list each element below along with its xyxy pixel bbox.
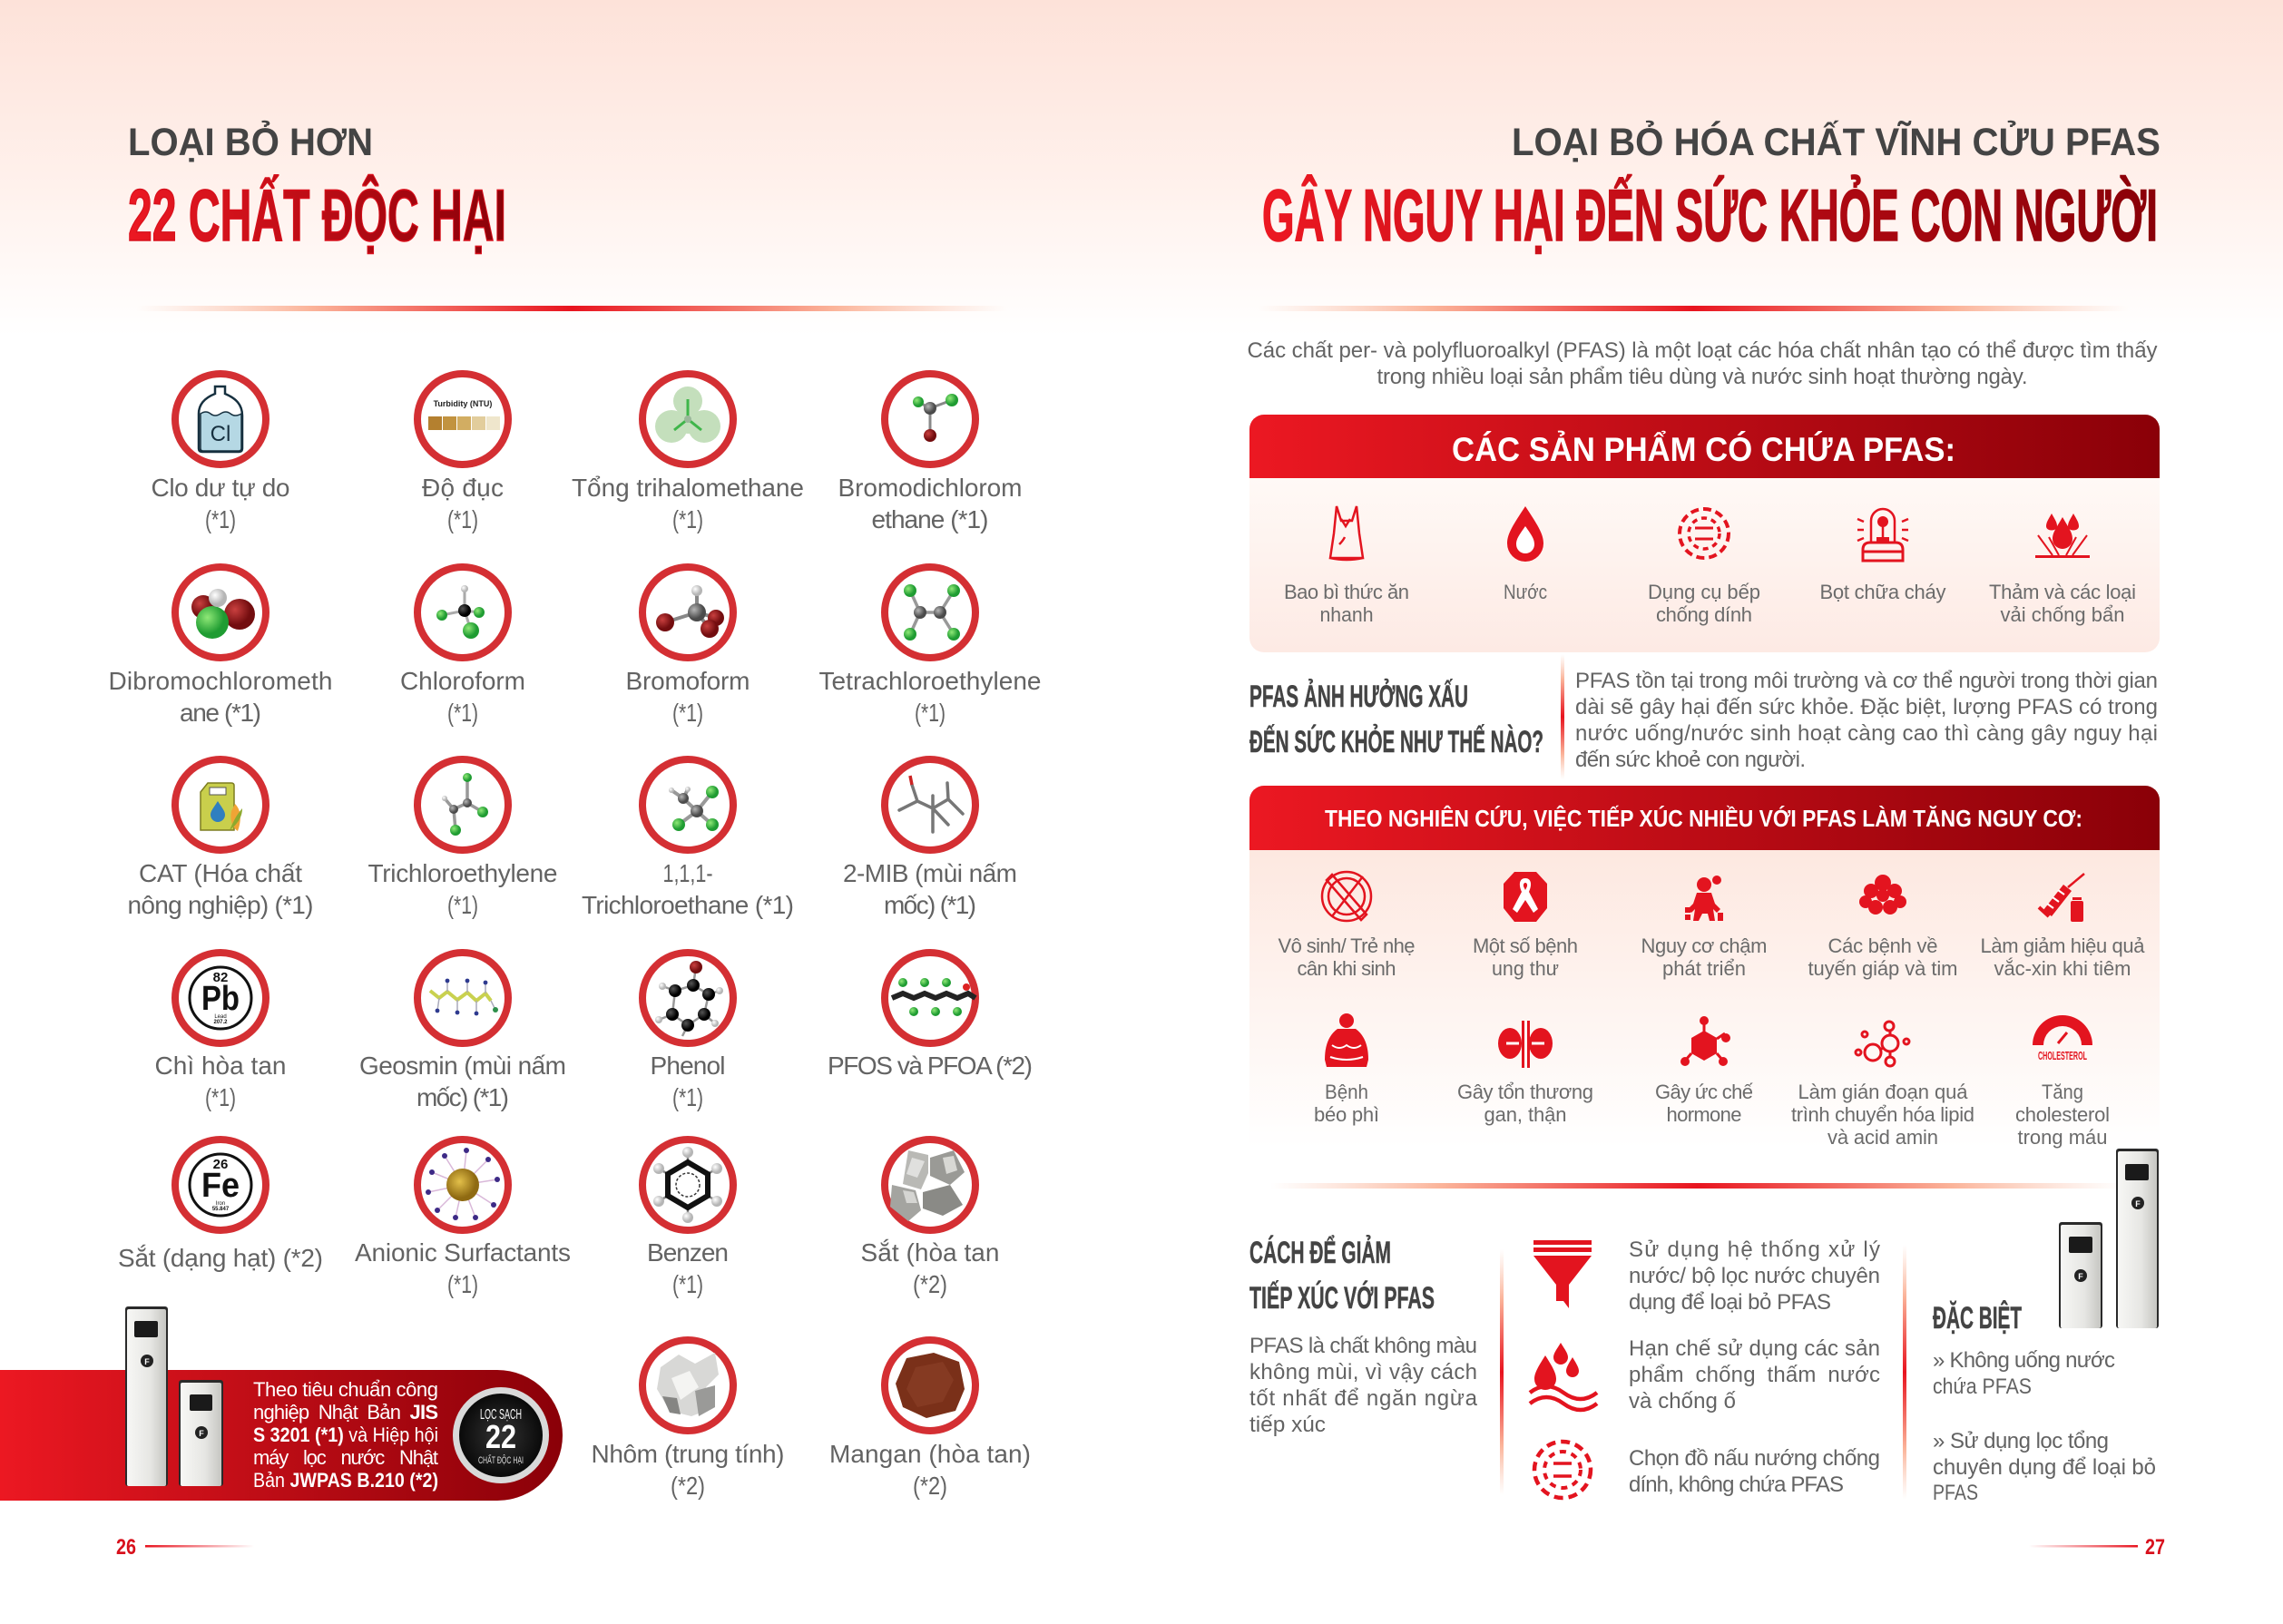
heading bar: THEO NGHIÊN CỨU, VIỆC TIẾP XÚC NHIỀU VỚI PFAS LÀM TĂNG NGUY CƠ: xyxy=(1325,805,2082,832)
left page heading xyxy=(128,120,506,257)
risk: cancer: Một số bệnh xyxy=(1473,934,1578,957)
item: Sat dang hat: 55.847 xyxy=(212,1207,230,1212)
block: how to reduce exposure: PFAS là chất không màu xyxy=(1249,1334,1477,1358)
block: special notes: PFAS xyxy=(1933,1481,1978,1505)
tip: non-stick cookware xyxy=(1629,1446,1880,1497)
risk: cancer: ung thư xyxy=(1492,957,1559,980)
risk: developmental delay xyxy=(1641,876,1768,980)
banner text: S 3201 (*1) và Hiệp hội xyxy=(253,1423,438,1446)
item: Benzen: Benzen xyxy=(647,1238,729,1267)
block: how to reduce exposure: CÁCH ĐỂ GIẢM xyxy=(1249,1236,1391,1270)
label: carpet xyxy=(1989,581,2136,626)
item: Bromodichloromethane: ethane (*1) xyxy=(871,505,989,533)
badge: 22: LỌC SẠCH xyxy=(480,1407,522,1423)
item: Tetrachloroethylene: (*1) xyxy=(915,699,946,727)
item: Mangan xyxy=(829,1340,1031,1500)
item: Do duc xyxy=(417,374,508,533)
item: 2-MIB: 2-MIB (mùi nấm xyxy=(843,859,1017,887)
risk: cholesterol: trong máu xyxy=(2018,1126,2107,1149)
item: Sat hoa tan: (*2) xyxy=(913,1270,947,1298)
tip: filter: dụng để loại bỏ PFAS xyxy=(1629,1290,1831,1315)
panel: products containing PFAS xyxy=(1249,415,2160,652)
icon: carpet fabric xyxy=(2035,514,2090,558)
item: Bromoform: (*1) xyxy=(672,699,703,727)
risk: liver kidney xyxy=(1457,1021,1593,1126)
header background xyxy=(0,0,2283,336)
risk: liver kidney: Gây tổn thương xyxy=(1457,1081,1593,1103)
item: Do duc: (*1) xyxy=(447,505,478,533)
product: tall filter xyxy=(125,1306,168,1486)
banner text: nghiệp Nhật Bản JIS xyxy=(253,1401,438,1423)
product: small filter right: F xyxy=(2078,1272,2083,1281)
label: foam: Bọt chữa cháy xyxy=(1820,581,1945,603)
block: how to reduce exposure: tốt nhất để ngăn ngừa xyxy=(1249,1386,1478,1411)
block: PFAS health paragraph: PFAS tồn tại trong môi trường và cơ thể người trong thời gian xyxy=(1575,669,2158,693)
item: 2-MIB: mốc) (*1) xyxy=(884,891,976,919)
item: Clo du tu do: Cl xyxy=(211,422,230,446)
product: small filter right xyxy=(2059,1222,2102,1328)
risk: liver kidney: gan, thận xyxy=(1484,1103,1566,1126)
risk: hormone: hormone xyxy=(1666,1103,1742,1126)
item: Anionic Surfactants xyxy=(355,1140,571,1298)
banner text: Theo tiêu chuẩn công xyxy=(253,1378,438,1401)
product: small filter: F xyxy=(199,1429,204,1438)
item: Tong trihalomethane: Tổng trihalomethane xyxy=(572,474,804,502)
label: water: Nước xyxy=(1504,581,1547,603)
panel: health risks xyxy=(1249,786,2160,1149)
block: special notes: ĐẶC BIỆT xyxy=(1933,1301,2022,1335)
left page heading: LOẠI BỎ HƠN xyxy=(128,120,373,164)
tip: limit water-proof products xyxy=(1629,1336,1880,1414)
item: Geosmin: mốc) (*1) xyxy=(416,1083,509,1111)
heading bar xyxy=(1249,415,2160,478)
item: Geosmin: Geosmin (mùi nấm xyxy=(359,1052,566,1080)
block: how to reduce exposure: không mùi, vì vậy cách xyxy=(1249,1360,1477,1384)
risk: hormone: Gây ức chế xyxy=(1655,1081,1753,1103)
risk: cholesterol: cholesterol xyxy=(2015,1103,2110,1126)
item: PFOS PFOA: PFOS và PFOA (*2) xyxy=(828,1052,1033,1080)
left page heading: 22 CHẤT ĐỘC HẠI xyxy=(128,174,506,257)
label: bag xyxy=(1284,581,1409,626)
risk: thyroid and heart xyxy=(1808,875,1958,980)
icon: fire foam alarm xyxy=(1857,509,1908,561)
badge: 22 xyxy=(453,1387,549,1483)
item: Clo du tu do: (*1) xyxy=(205,505,236,533)
product: small filter xyxy=(179,1380,223,1486)
item: Dibromochloromethane xyxy=(109,567,332,727)
item: Dibromochloromethane: ane (*1) xyxy=(180,699,261,727)
item: Sat dang hat: 26 xyxy=(213,1157,228,1172)
risk: hormone xyxy=(1655,1016,1753,1126)
block: PFAS health question: PFAS ẢNH HƯỞNG XẤU xyxy=(1249,680,1468,714)
item: Chi hoa tan: Lead xyxy=(214,1014,227,1020)
item: Chi hoa tan: 207.2 xyxy=(213,1020,228,1025)
item: Chi hoa tan xyxy=(154,953,287,1111)
label: cookware: Dụng cụ bếp xyxy=(1648,581,1760,603)
block: special notes: chuyên dụng để loại bỏ xyxy=(1933,1455,2156,1480)
item: Bromodichloromethane: Bromodichlorom xyxy=(838,474,1022,502)
item: Mangan: Mangan (hòa tan) xyxy=(829,1440,1031,1468)
item: Chloroform: (*1) xyxy=(447,699,478,727)
icon: cookware xyxy=(1680,509,1729,558)
item: Trichloroethylene: Trichloroethylene xyxy=(368,859,557,887)
item: Nhom: Nhôm (trung tính) xyxy=(592,1440,784,1468)
block: special notes: chứa PFAS xyxy=(1933,1375,2032,1399)
item: Bromodichloromethane xyxy=(838,374,1022,533)
risk: lipid and amino acid: trình chuyển hóa lipid xyxy=(1791,1103,1974,1126)
risk: thyroid and heart: Các bệnh về xyxy=(1827,934,1938,957)
tip: non-stick cookware: Chọn đồ nấu nướng chống xyxy=(1629,1446,1880,1471)
item: PFOS PFOA xyxy=(828,953,1033,1080)
intro text xyxy=(1247,338,2158,389)
intro text: trong nhiều loại sản phẩm tiêu dùng và nước sinh hoạt thường ngày. xyxy=(1377,365,2027,389)
icon: water drops xyxy=(1530,1343,1597,1410)
icon: bag xyxy=(1330,506,1363,560)
product: tall filter right: F xyxy=(2135,1199,2141,1208)
item: Chi hoa tan: (*1) xyxy=(205,1083,236,1111)
risk: vaccine: Làm giảm hiệu quả xyxy=(1980,934,2145,957)
item: Benzen: (*1) xyxy=(672,1270,703,1298)
item: Anionic Surfactants: Anionic Surfactants xyxy=(355,1238,571,1267)
badge: 22: CHẤT ĐỘC HẠI xyxy=(478,1454,524,1466)
item: Sat hoa tan: Sắt (hòa tan xyxy=(860,1238,1000,1267)
item: Mangan: (*2) xyxy=(913,1472,947,1500)
risk: lipid and amino acid: và acid amin xyxy=(1827,1126,1938,1149)
block: PFAS health paragraph: dài sẽ gây hại đến sức khỏe. Đặc biệt, lượng PFAS có trong xyxy=(1575,695,2158,719)
page number 26: 26 xyxy=(116,1535,136,1560)
risk: infertility: Vô sinh/ Trẻ nhẹ xyxy=(1278,934,1416,957)
risk: obesity: Bệnh xyxy=(1325,1081,1368,1103)
right page heading xyxy=(1262,120,2161,257)
heading bar xyxy=(1249,786,2160,850)
risk: developmental delay: phát triển xyxy=(1662,957,1746,980)
risk: vaccine xyxy=(1980,874,2145,980)
item: Tong trihalomethane: (*1) xyxy=(672,505,703,533)
item: Clo du tu do xyxy=(151,374,290,533)
heading bar: CÁC SẢN PHẨM CÓ CHỨA PFAS: xyxy=(1452,430,1955,468)
item: Sat dang hat xyxy=(118,1140,323,1272)
risk: vaccine: vắc-xin khi tiêm xyxy=(1994,957,2131,980)
item: Dibromochloromethane: Dibromochlorometh xyxy=(109,667,332,695)
item: Sat hoa tan xyxy=(860,1140,1000,1298)
block: PFAS health question: ĐẾN SỨC KHỎE NHƯ THẾ NÀO? xyxy=(1249,725,1543,759)
item: Phenol xyxy=(642,953,733,1111)
item: Sat dang hat: Iron xyxy=(216,1201,225,1207)
icon: funnel xyxy=(1533,1240,1592,1308)
tip: limit water-proof products: phẩm chống thấm nước xyxy=(1629,1363,1880,1387)
tip: non-stick cookware: dính, không chứa PFAS xyxy=(1629,1472,1844,1497)
block: how to reduce exposure xyxy=(1249,1236,1478,1437)
item: Bromoform: Bromoform xyxy=(626,667,750,695)
label: bag: nhanh xyxy=(1319,603,1374,626)
block: PFAS health paragraph: đến sức khoẻ con người. xyxy=(1575,748,1806,772)
banner text xyxy=(253,1378,438,1492)
item: Clo du tu do: Clo dư tự do xyxy=(151,474,290,502)
item: Bromoform xyxy=(626,567,750,727)
item: Nhom: (*2) xyxy=(671,1472,705,1500)
item: Anionic Surfactants: (*1) xyxy=(447,1270,478,1298)
risk: cholesterol: Tăng xyxy=(2042,1081,2083,1103)
item: Chi hoa tan: 82 xyxy=(213,970,228,985)
block: how to reduce exposure: tiếp xúc xyxy=(1249,1413,1326,1437)
list: reduction tips xyxy=(1530,1238,1880,1498)
item: Trichloroethylene: (*1) xyxy=(447,891,478,919)
banner text: máy lọc nước Nhật xyxy=(253,1446,438,1469)
page number 27: 27 xyxy=(2145,1535,2165,1560)
right page heading: LOẠI BỎ HÓA CHẤT VĨNH CỬU PFAS xyxy=(1512,120,2161,164)
callout: standards banner xyxy=(0,1306,563,1501)
risk: lipid and amino acid xyxy=(1791,1022,1974,1149)
item: Geosmin xyxy=(359,953,566,1111)
item: 1,1,1-Trichloroethane xyxy=(582,759,794,919)
tip: limit water-proof products: và chống ố xyxy=(1629,1389,1736,1414)
item: Chi hoa tan: Pb xyxy=(201,980,240,1018)
block: special notes: » Không uống nước xyxy=(1933,1348,2115,1373)
product: tall filter right xyxy=(2116,1149,2159,1328)
badge: 22: 22 xyxy=(485,1418,516,1455)
panel: chemicals grid xyxy=(109,374,1042,1500)
block: PFAS health question xyxy=(1249,680,1543,759)
risk: obesity xyxy=(1314,1013,1379,1126)
risk: infertility: cân khi sinh xyxy=(1298,957,1396,980)
item: Phenol: (*1) xyxy=(672,1083,703,1111)
item: CAT: nông nghiệp) (*1) xyxy=(127,891,314,919)
item: Sat dang hat: Sắt (dạng hạt) (*2) xyxy=(118,1244,323,1272)
risk: obesity: béo phì xyxy=(1314,1103,1379,1126)
item: Chi hoa tan: Chì hòa tan xyxy=(154,1052,287,1080)
item: Chloroform: Chloroform xyxy=(400,667,525,695)
risk: infertility xyxy=(1278,872,1416,980)
block: how to reduce exposure: TIẾP XÚC VỚI PFAS xyxy=(1249,1281,1435,1316)
item: Do duc: Độ đục xyxy=(422,474,504,502)
item: 2-MIB xyxy=(843,759,1017,919)
risk: cholesterol xyxy=(2015,1015,2110,1149)
item: 1,1,1-Trichloroethane: 1,1,1- xyxy=(662,859,713,887)
tip: filter: nước/ bộ lọc nước chuyên xyxy=(1629,1264,1880,1288)
block: special notes: » Sử dụng lọc tổng xyxy=(1933,1429,2109,1453)
item: Tetrachloroethylene xyxy=(818,567,1042,727)
risk: lipid and amino acid: Làm gián đoạn quá xyxy=(1798,1081,1968,1103)
tip: filter: Sử dụng hệ thống xử lý xyxy=(1629,1238,1880,1262)
intro text: Các chất per- và polyfluoroalkyl (PFAS) là một loạt các hóa chất nhân tạo có thể được tìm thấy xyxy=(1247,338,2158,363)
banner text: Bản JWPAS B.210 (*2) xyxy=(253,1469,438,1492)
block: PFAS health paragraph xyxy=(1575,669,2158,772)
label: cookware: chống dính xyxy=(1656,603,1752,626)
item: CAT: CAT (Hóa chất xyxy=(139,859,302,887)
icon: cookware xyxy=(1534,1442,1591,1498)
item: Do duc: Turbidity (NTU) xyxy=(434,399,492,408)
item: Nhom xyxy=(592,1340,784,1500)
item: 1,1,1-Trichloroethane: Trichloroethane (*1) xyxy=(582,891,794,919)
item: Sat dang hat: Fe xyxy=(201,1167,240,1205)
icon: drop xyxy=(1507,506,1543,562)
risk: cholesterol: CHOLESTEROL xyxy=(2038,1049,2087,1062)
item: Tetrachloroethylene: Tetrachloroethylene xyxy=(818,667,1042,695)
tip: filter xyxy=(1629,1238,1880,1315)
item: Trichloroethylene xyxy=(368,759,557,919)
item: CAT xyxy=(127,759,314,919)
risk: developmental delay: Nguy cơ chậm xyxy=(1641,934,1768,957)
product: tall filter: F xyxy=(144,1357,150,1366)
block: special notes xyxy=(1933,1301,2156,1505)
item: Benzen xyxy=(642,1140,733,1298)
item: Chloroform xyxy=(400,567,525,727)
label: cookware xyxy=(1648,581,1760,626)
item: Phenol: Phenol xyxy=(650,1052,726,1080)
label: carpet: vải chống bẩn xyxy=(2000,603,2125,626)
label: carpet: Thảm và các loại xyxy=(1989,581,2136,603)
risk: cancer xyxy=(1473,872,1578,980)
label: bag: Bao bì thức ăn xyxy=(1284,581,1409,603)
risk: thyroid and heart: tuyến giáp và tim xyxy=(1808,957,1958,980)
block: PFAS health paragraph: nước uống/nước sinh hoạt càng cao thì càng gây nguy hại xyxy=(1575,721,2158,746)
tip: limit water-proof products: Hạn chế sử dụng các sản xyxy=(1629,1336,1880,1361)
item: Tong trihalomethane xyxy=(572,374,804,533)
